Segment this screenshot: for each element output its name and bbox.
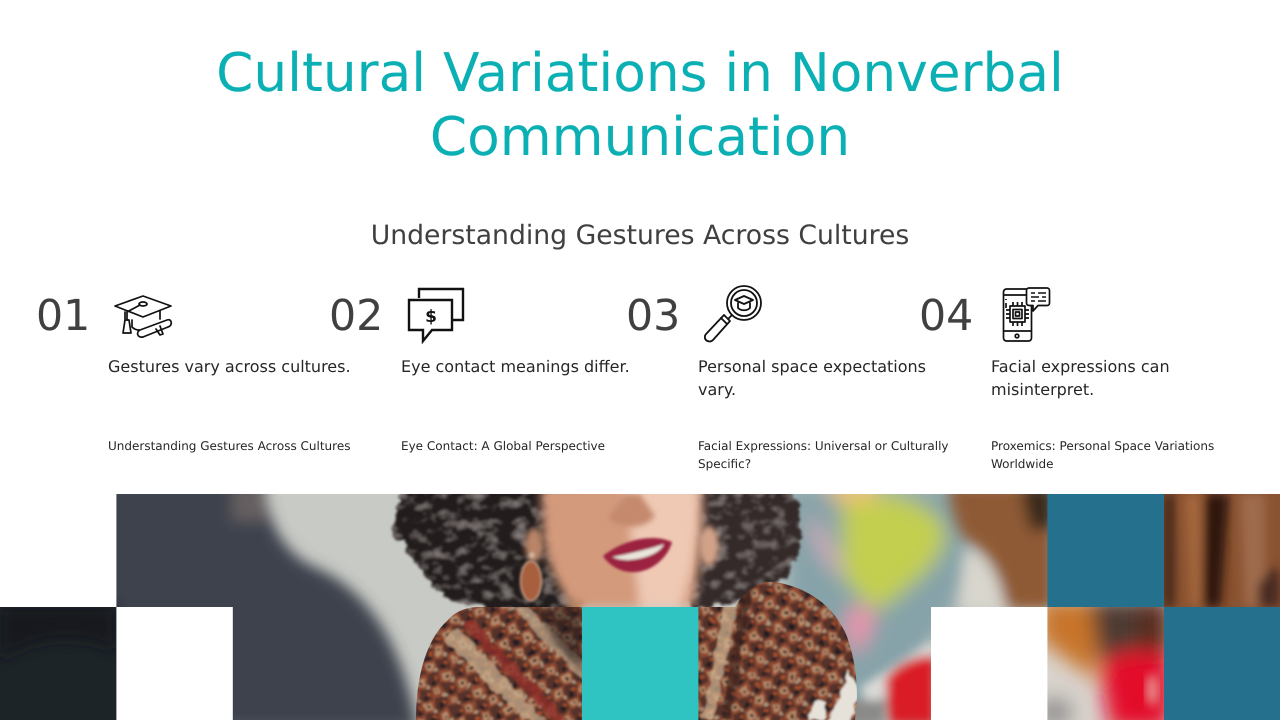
tile: teal [582,607,698,720]
step 01 text: Gestures vary across cultures. [108,357,351,376]
tile: white bottom [116,607,233,720]
step 04 text: Facial expressions can [991,357,1170,376]
step 04 text: misinterpret. [991,380,1094,399]
blurred person on right [948,485,1055,610]
step 03 caption: Specific? [698,457,751,471]
tile: white bottom right [931,607,1047,720]
number 03: 03 [626,291,680,341]
face and neck [541,485,703,680]
tile: blue upper [1047,494,1164,607]
step 04 caption [991,439,1214,471]
title [216,41,1064,168]
blouse [416,582,857,720]
title: Communication [430,105,850,168]
step 04 caption: Worldwide [991,457,1054,471]
step 03 text [698,357,926,399]
woman's hair [393,485,801,660]
step 04 text [991,357,1170,399]
globe [785,485,990,720]
tile: bottom-left dark photo [0,607,116,720]
step 03 text: Personal space expectations [698,357,926,376]
photo base [116,494,1048,720]
step 03 caption [698,439,949,471]
icon: graduation cap and diploma [114,295,172,338]
icon: magnifying glass with cap [704,285,762,342]
step 03 text: vary. [698,380,736,399]
icon: speech bubbles with dollar [408,288,464,344]
step 03 caption: Facial Expressions: Universal or Culturally [698,439,949,453]
step 04 caption: Proxemics: Personal Space Variations [991,439,1214,453]
photo mosaic [0,494,1280,720]
step 02 caption: Eye Contact: A Global Perspective [401,439,605,453]
number 04: 04 [919,291,973,341]
earring [520,552,542,601]
tile: bottom-right photo with red [1047,607,1164,720]
number 01: 01 [36,291,90,341]
number 02: 02 [329,291,383,341]
title: Cultural Variations in Nonverbal [216,41,1064,104]
blurred person on left [100,480,418,720]
nose and ears [525,494,719,566]
icon: smartphone with chip and message [1002,287,1050,342]
icon: speech bubbles with dollar: $ [425,307,437,327]
tile: white top-left [0,494,116,607]
subtitle: Understanding Gestures Across Cultures [371,220,909,251]
step 01 caption: Understanding Gestures Across Cultures [108,439,350,453]
red object lower right [845,640,935,720]
step 02 text: Eye contact meanings differ. [401,357,630,376]
tile: blue lower [1164,607,1280,720]
lips and teeth [603,538,672,572]
tile: top-right brown photo [1164,494,1280,607]
